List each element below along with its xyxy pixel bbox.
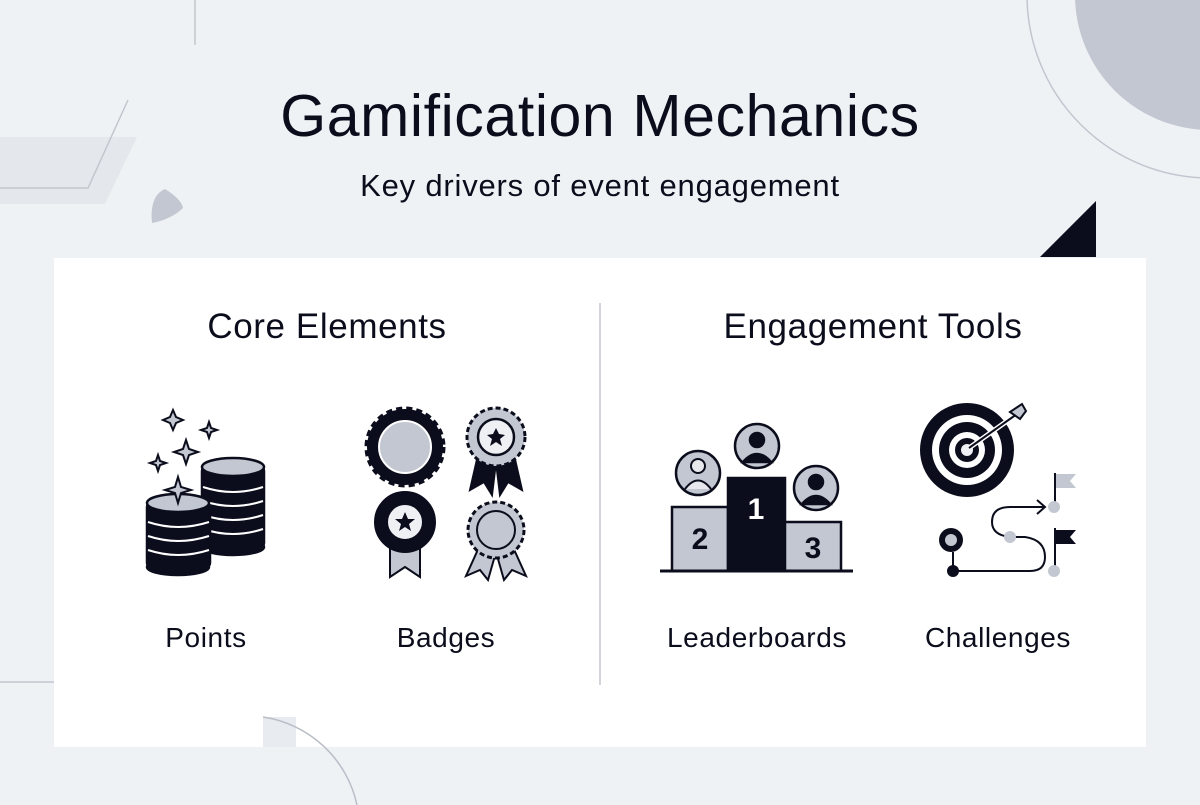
icon: leaderboard podium: 3: [805, 532, 821, 565]
heading: engagement tools: Engagement Tools: [724, 307, 1022, 346]
panel: main: [54, 258, 1146, 805]
heading: core elements: Core Elements: [207, 307, 447, 346]
subtitle: Key drivers of event engagement: [360, 168, 840, 203]
label: badges: Badges: [397, 622, 495, 653]
title: Gamification Mechanics: [280, 83, 920, 149]
icon: points coins: [147, 410, 264, 575]
icon: leaderboard podium: 1: [748, 493, 764, 526]
icon: leaderboard podium: [660, 424, 853, 571]
label: points: Points: [165, 622, 247, 653]
icon: leaderboard podium: 2: [692, 523, 708, 556]
label: leaderboards: Leaderboards: [667, 622, 847, 653]
label: challenges: Challenges: [925, 622, 1071, 653]
icon: challenges target and path: [920, 403, 1076, 577]
icon: badges: [367, 408, 526, 580]
